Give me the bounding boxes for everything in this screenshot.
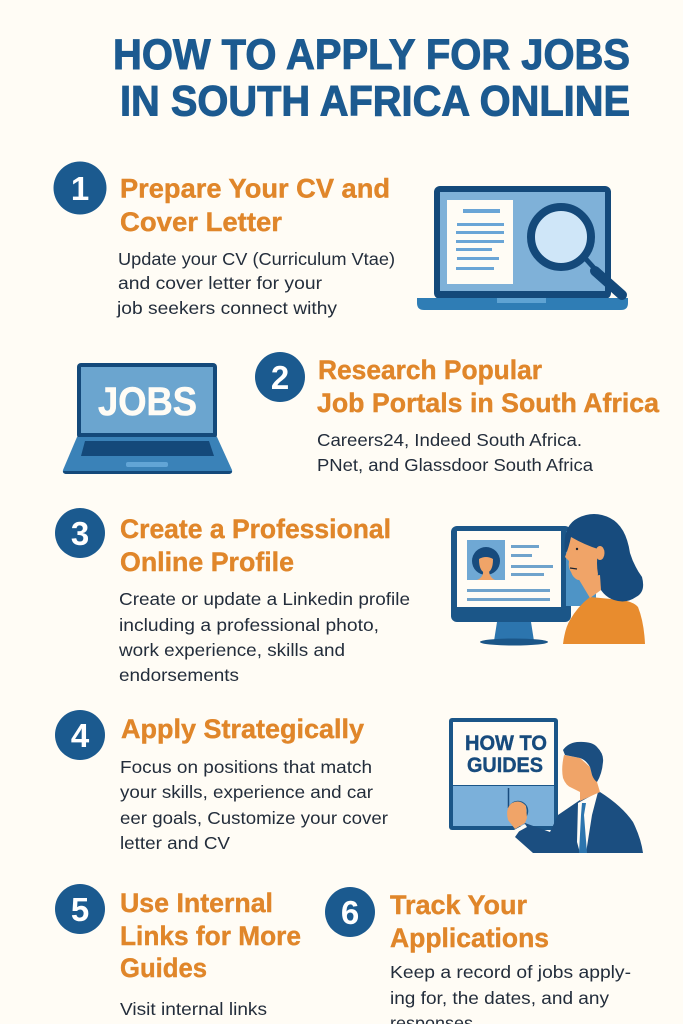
number badge 4 xyxy=(55,710,105,760)
icon: laptop with JOBS xyxy=(63,363,232,474)
number badge 2: 2 xyxy=(271,359,289,396)
number badge 5 xyxy=(55,884,105,934)
heading: step 6: Applications xyxy=(390,923,549,953)
icon: laptop with JOBS: JOBS xyxy=(98,380,197,424)
number badge 4: 4 xyxy=(71,717,90,754)
title: IN SOUTH AFRICA ONLINE xyxy=(120,78,630,126)
text: step 1 body: Update your CV (Curriculum Vtae) xyxy=(118,249,395,269)
text: step 1 body: job seekers connect withy xyxy=(116,298,337,318)
text: step 6 body xyxy=(390,962,631,1024)
text: step 2 body xyxy=(317,430,593,475)
text: step 4 body xyxy=(120,757,388,853)
text: step 2 body: Careers24, Indeed South Africa. xyxy=(317,430,582,450)
text: step 4 body: letter and CV xyxy=(120,833,230,853)
icon: woman at monitor with profile xyxy=(451,514,645,646)
heading: step 2: Research Popular xyxy=(318,355,542,385)
text: step 3 body: including a professional photo, xyxy=(119,615,379,635)
text: step 4 body: your skills, experience and car xyxy=(120,782,373,802)
heading: step 3 xyxy=(120,514,391,577)
text: step 6 body: Keep a record of jobs apply- xyxy=(390,962,631,982)
heading: step 5: Guides xyxy=(120,953,207,983)
number badge 2 xyxy=(255,352,305,402)
number badge 1 xyxy=(54,162,106,214)
number badge 6 xyxy=(325,887,375,937)
title: HOW TO APPLY FOR JOBS xyxy=(113,32,630,79)
heading: step 1: Cover Letter xyxy=(120,207,282,237)
panel: step 2 research portals xyxy=(63,352,659,475)
text: step 5 body: Visit internal links xyxy=(120,999,267,1019)
heading: step 6 xyxy=(390,890,549,953)
text: step 2 body: PNet, and Glassdoor South Africa xyxy=(317,455,593,475)
heading: step 1 xyxy=(120,174,390,237)
panel: step 6 track applications xyxy=(325,887,631,1024)
heading: step 2 xyxy=(317,355,659,418)
number badge 3: 3 xyxy=(71,515,89,552)
number badge 3 xyxy=(55,508,105,558)
text: step 3 body: Create or update a Linkedin profile xyxy=(119,589,410,609)
text: step 1 body xyxy=(116,249,395,318)
heading: step 3: Create a Professional xyxy=(120,514,391,544)
title xyxy=(113,32,630,126)
icon: how-to guides board and man in suit xyxy=(449,718,643,853)
number badge 5: 5 xyxy=(71,891,89,928)
text: step 1 body: and cover letter for your xyxy=(118,273,322,293)
heading: step 5: Links for More xyxy=(120,921,301,951)
heading: step 5 xyxy=(120,888,301,983)
heading: step 4: Apply Strategically xyxy=(121,714,364,744)
text: step 3 body xyxy=(118,589,410,685)
icon: laptop with document and magnifying glass xyxy=(417,186,628,310)
heading: step 6: Track Your xyxy=(390,890,527,920)
heading: step 1: Prepare Your CV and xyxy=(120,174,390,204)
panel: step 1 prepare CV xyxy=(54,162,628,318)
text: step 3 body: endorsements xyxy=(119,665,239,685)
heading: step 3: Online Profile xyxy=(120,547,294,577)
heading: step 5: Use Internal xyxy=(120,888,273,918)
heading: step 2: Job Portals in South Africa xyxy=(317,388,659,418)
number badge 1: 1 xyxy=(71,170,89,207)
panel: step 4 apply strategically xyxy=(55,710,643,853)
text: step 4 body: Focus on positions that match xyxy=(120,757,372,777)
panel: step 5 internal links xyxy=(55,884,301,1019)
icon: how-to guides board and man in suit: HOW TO xyxy=(465,732,547,755)
text: step 4 body: eer goals, Customize your cover xyxy=(120,808,388,828)
number badge 6: 6 xyxy=(341,894,359,931)
text: step 6 body: ing for, the dates, and any xyxy=(390,988,609,1008)
icon: how-to guides board and man in suit: GUIDES xyxy=(467,754,543,777)
text: step 3 body: work experience, skills and xyxy=(118,640,345,660)
panel: step 3 online profile xyxy=(55,508,645,685)
